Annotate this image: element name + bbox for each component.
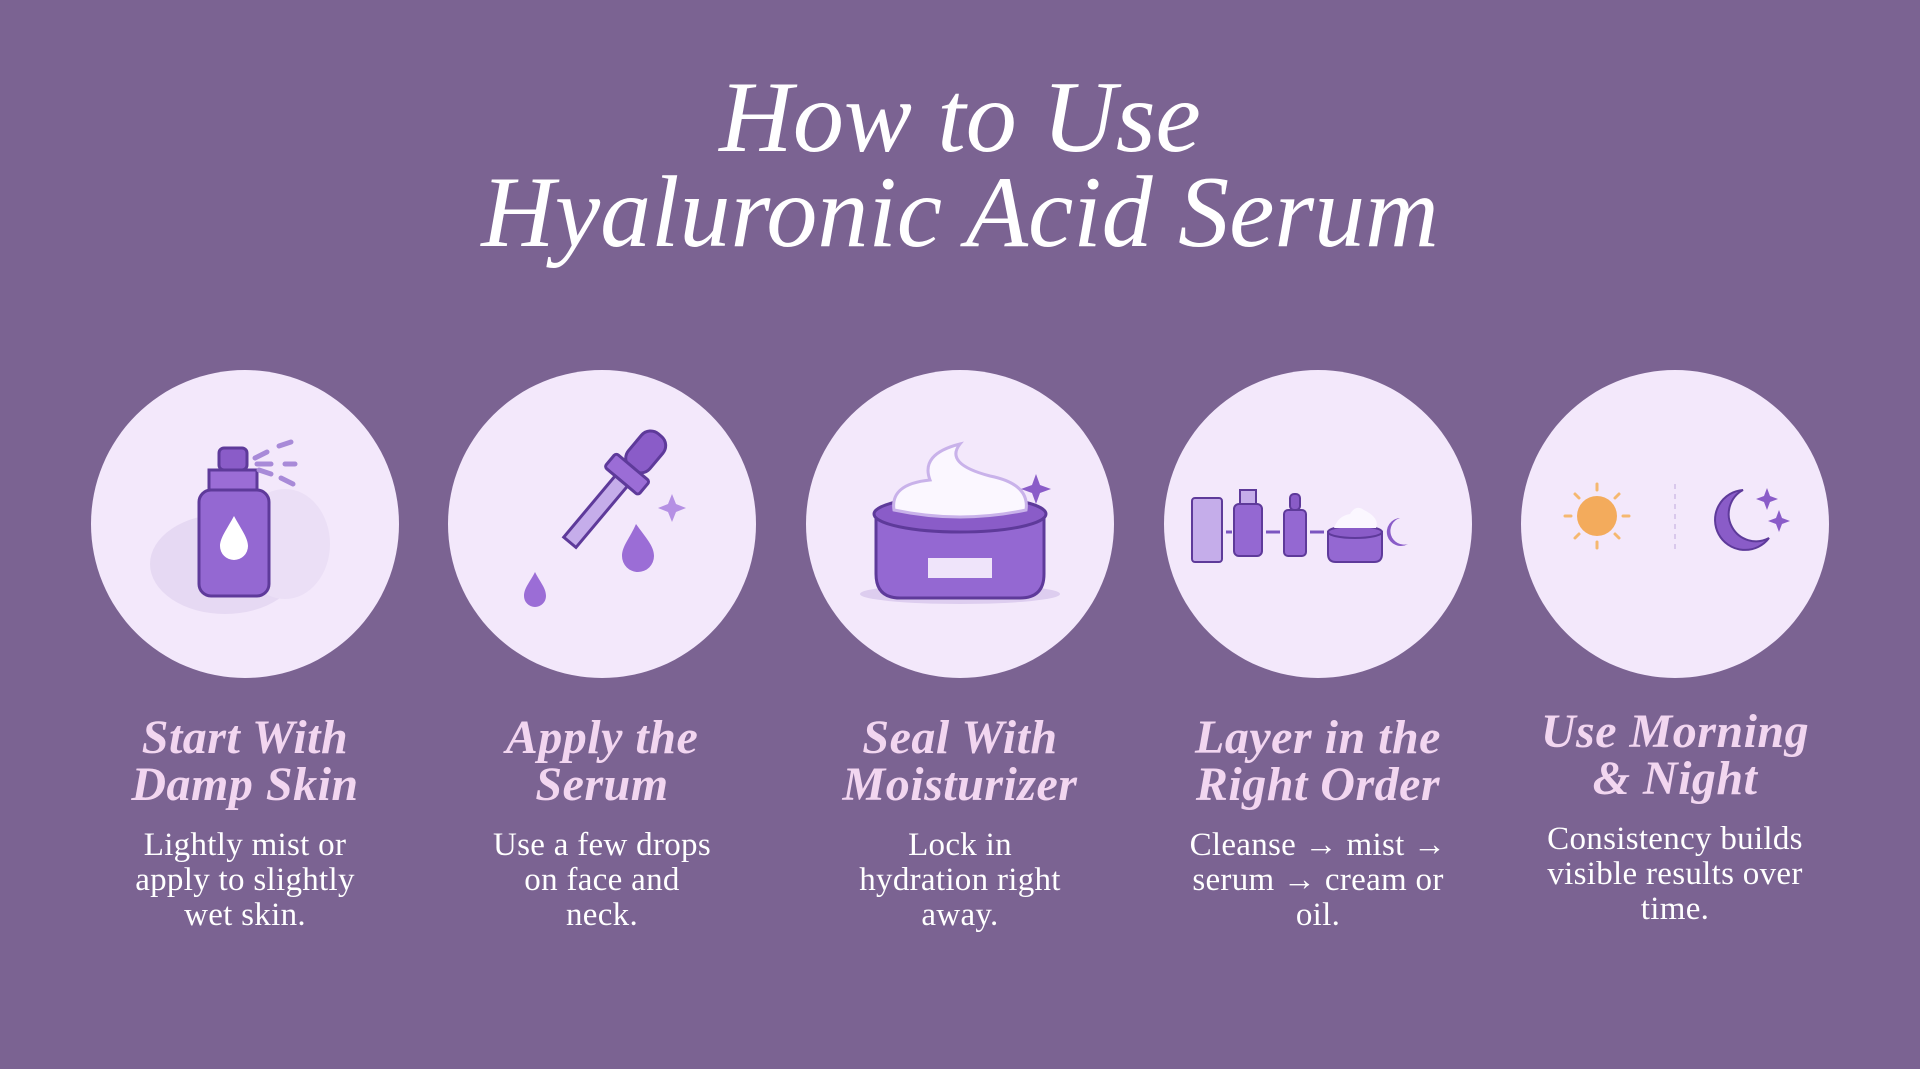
step 5 text: Use Morning — [1541, 705, 1809, 758]
step 3 text: Moisturizer — [843, 758, 1077, 811]
step 3 text: away. — [921, 897, 999, 933]
step 1 text: Start With — [142, 711, 348, 764]
step 2 text: on face and — [524, 862, 680, 898]
step 3 text — [842, 711, 1078, 933]
step 5 text: & Night — [1593, 752, 1757, 805]
step 3 text: Lock in — [908, 827, 1012, 863]
step 2 text: neck. — [566, 897, 638, 933]
step 5 text: time. — [1641, 891, 1709, 927]
title: Hyaluronic Acid Serum — [481, 156, 1439, 269]
step 3 text: hydration right — [859, 862, 1061, 898]
step 4 text: Cleanse → mist → — [1190, 827, 1446, 863]
title: How to Use — [719, 61, 1201, 174]
step 5 text: visible results over — [1547, 856, 1803, 892]
step 5 text: Consistency builds — [1547, 821, 1803, 857]
step 4 text: Layer in the — [1195, 711, 1441, 764]
step 2 text: Use a few drops — [493, 827, 711, 863]
step 4 text — [1190, 711, 1446, 933]
step 2 text: Serum — [535, 758, 669, 811]
icon circle: dropper — [448, 370, 756, 678]
title — [480, 61, 1439, 269]
step 2 text — [493, 711, 711, 933]
icon circle: sun and moon — [1521, 370, 1829, 678]
step 1 text: apply to slightly — [135, 862, 355, 898]
step 3 text: Seal With — [862, 711, 1058, 764]
icon circle: layering order — [1164, 370, 1472, 678]
step 1 text — [131, 711, 359, 933]
icon circle: spray bottle — [91, 370, 399, 678]
step 4 text: serum → cream or — [1192, 862, 1444, 898]
icon circle: moisturizer jar — [806, 370, 1114, 678]
step 2 text: Apply the — [506, 711, 698, 764]
step 1 text: wet skin. — [184, 897, 306, 933]
step 4 text: Right Order — [1196, 758, 1440, 811]
step 1 text: Lightly mist or — [144, 827, 346, 863]
step 5 text — [1541, 705, 1809, 927]
step 4 text: oil. — [1296, 897, 1340, 933]
step 1 text: Damp Skin — [131, 758, 359, 811]
